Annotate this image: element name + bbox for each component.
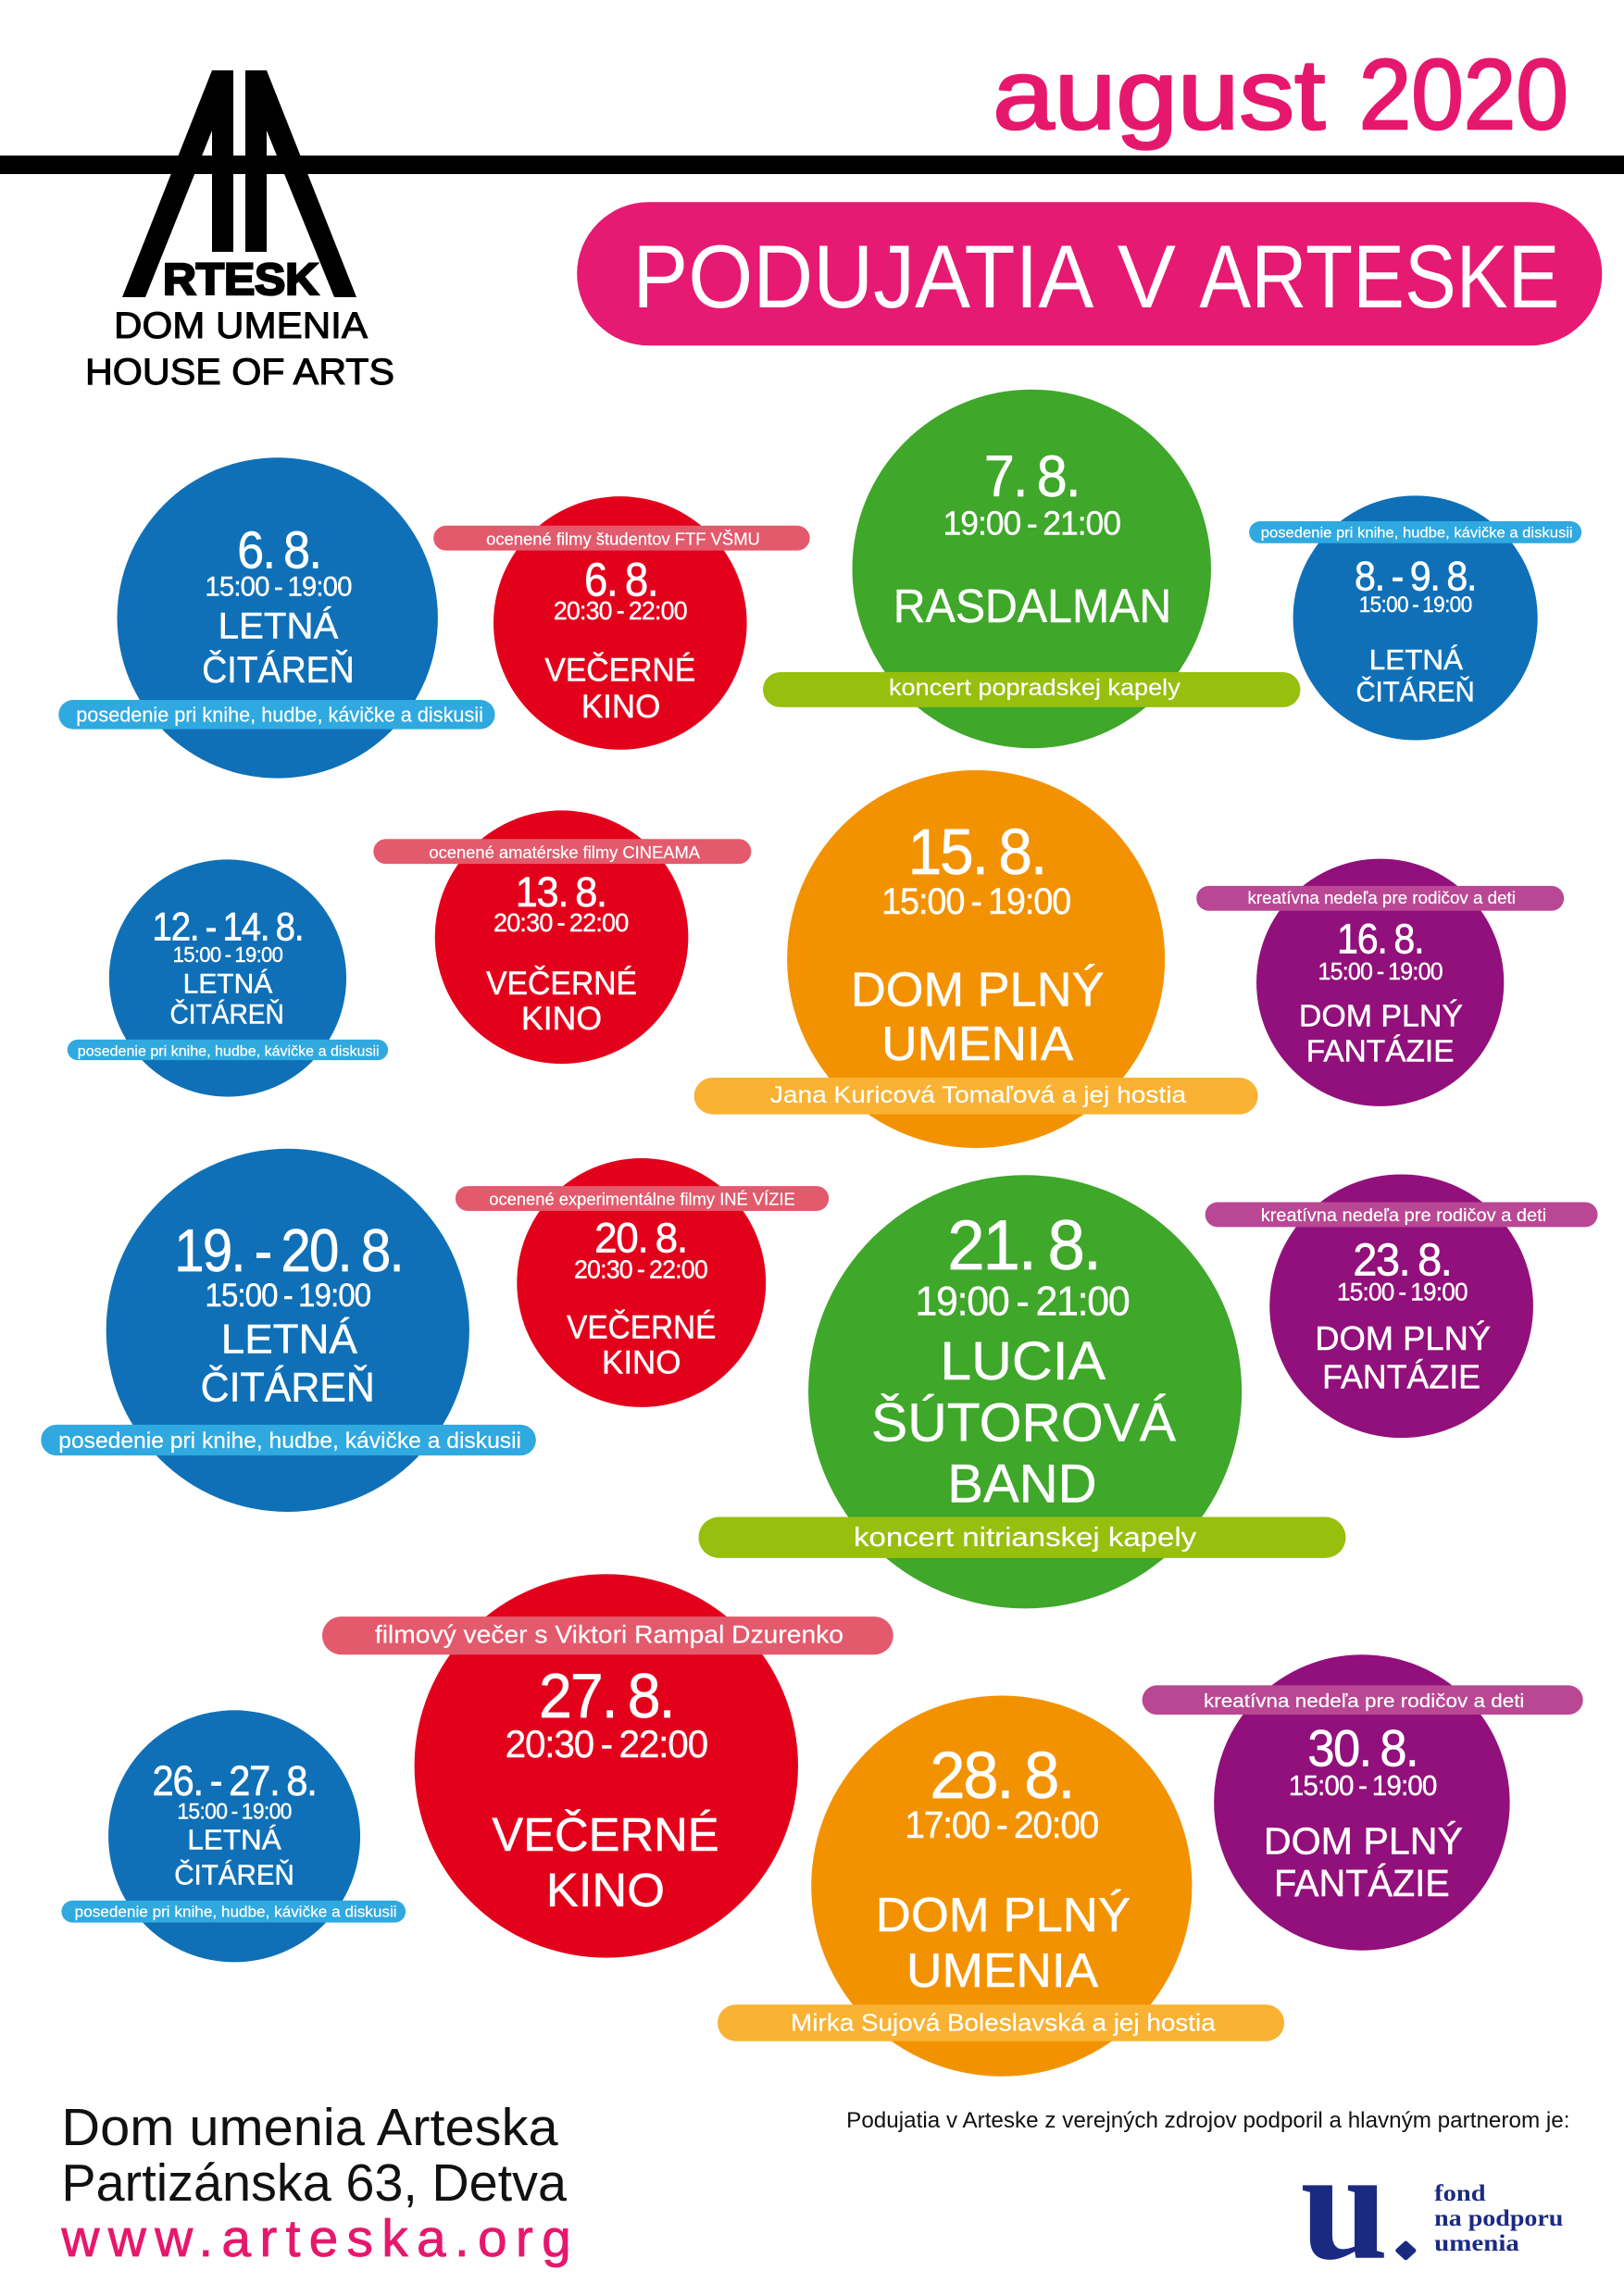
- event: Večerné kino 13. 8.: 20:30 - 22:00: [493, 908, 629, 937]
- heading pill: ARTESKE: [1199, 228, 1559, 327]
- event: Letná čitáreň 8. - 9. 8.: LETNÁ: [1369, 643, 1463, 676]
- logo: Fond na podporu umenia: na podporu: [1434, 2205, 1563, 2231]
- event: Lucia Šútorová Band 21. 8.: ŠÚTOROVÁ: [871, 1392, 1176, 1453]
- black header bar: [0, 156, 1624, 174]
- logo: Fond na podporu umenia: u: [1300, 2117, 1388, 2292]
- event: Letná čitáreň 12. - 14. 8.: LETNÁ: [183, 968, 273, 999]
- event: Večerné kino 13. 8.: 13. 8.: [516, 867, 606, 916]
- event: Letná čitáreň 19. - 20. 8.: posedenie pri knihe, hudbe, kávičke a diskusii: [58, 1429, 521, 1454]
- event: Letná čitáreň 12. - 14. 8.: ČITÁREŇ: [169, 999, 284, 1030]
- event: Večerné kino 27. 8.: [322, 1574, 893, 1958]
- event: Letná čitáreň 19. - 20. 8.: 15:00 - 19:00: [205, 1279, 370, 1314]
- event: Letná čitáreň 12. - 14. 8.: posedenie pri knihe, hudbe, kávičke a diskusii: [78, 1043, 380, 1059]
- event: Dom plný fantázie 30. 8.: [1143, 1654, 1583, 1951]
- event: Večerné kino 13. 8.: VEČERNÉ: [486, 966, 637, 1002]
- event: Večerné kino 13. 8.: ocenené amatérske filmy CINEAMA: [429, 843, 701, 862]
- event: Letná čitáreň 6. 8.: 6. 8.: [237, 521, 320, 580]
- event: Letná čitáreň 12. - 14. 8.: [68, 859, 388, 1097]
- event: Večerné kino 13. 8.: KINO: [521, 1002, 602, 1037]
- event: Letná čitáreň 6. 8.: 15:00 - 19:00: [205, 572, 352, 603]
- event: Dom plný umenia 28. 8.: 17:00 - 20:00: [905, 1803, 1098, 1846]
- event: Večerné kino 13. 8.: [373, 810, 751, 1064]
- heading pill: PODUJATIA: [632, 228, 1094, 327]
- event: Dom plný fantázie 16. 8.: [1196, 859, 1564, 1106]
- event: Večerné kino 6. 8.: [433, 496, 810, 750]
- event: Dom plný umenia 28. 8.: DOM PLNÝ: [876, 1889, 1131, 1942]
- event: Večerné kino 20. 8.: 20:30 - 22:00: [574, 1255, 707, 1284]
- event: Letná čitáreň 19. - 20. 8.: [41, 1149, 536, 1512]
- event: Dom plný umenia 15. 8.: Jana Kuricová Tomaľová a jej hostia: [770, 1082, 1187, 1108]
- event: Dom plný fantázie 16. 8.: kreatívna nedeľa pre rodičov a deti: [1248, 889, 1516, 907]
- event: Dom plný fantázie 30. 8.: DOM PLNÝ: [1264, 1819, 1463, 1862]
- event: Dom plný fantázie 16. 8.: FANTÁZIE: [1306, 1035, 1455, 1069]
- event: Dom plný umenia 28. 8.: [718, 1695, 1284, 2077]
- event: Lucia Šútorová Band 21. 8.: 21. 8.: [947, 1206, 1100, 1285]
- event: Lucia Šútorová Band 21. 8.: BAND: [947, 1454, 1097, 1515]
- event: Letná čitáreň 6. 8.: posedenie pri knihe, hudbe, kávičke a diskusii: [76, 704, 483, 727]
- event: Letná čitáreň 26. - 27. 8.: [61, 1710, 406, 1962]
- event: Letná čitáreň 19. - 20. 8.: ČITÁREŇ: [201, 1365, 375, 1411]
- event: Dom plný umenia 28. 8.: Mirka Sujová Boleslavská a jej hostia: [791, 2009, 1216, 2037]
- event: Letná čitáreň 26. - 27. 8.: LETNÁ: [187, 1824, 281, 1856]
- event: Letná čitáreň 19. - 20. 8.: 19. - 20. 8.: [174, 1217, 403, 1284]
- event: Letná čitáreň 26. - 27. 8.: posedenie pri knihe, hudbe, kávičke a diskusii: [75, 1903, 397, 1920]
- title: month: 2020: [1359, 39, 1568, 150]
- event: Večerné kino 6. 8.: VEČERNÉ: [544, 652, 695, 688]
- event: Dom plný fantázie 23. 8.: FANTÁZIE: [1322, 1357, 1480, 1395]
- sponsor note: Podujatia v Arteske z verejných zdrojov podporil a hlavným partnerom je:: [846, 2109, 1569, 2133]
- event: Letná čitáreň 8. - 9. 8.: 8. - 9. 8.: [1355, 554, 1476, 599]
- event: Rasdalman 7. 8.: RASDALMAN: [893, 580, 1171, 632]
- event: Lucia Šútorová Band 21. 8.: LUCIA: [940, 1331, 1106, 1391]
- event: Večerné kino 27. 8.: KINO: [546, 1864, 665, 1916]
- event: Letná čitáreň 19. - 20. 8.: LETNÁ: [221, 1316, 357, 1362]
- event: Dom plný umenia 15. 8.: 15. 8.: [908, 816, 1045, 888]
- title: month: august: [993, 39, 1325, 150]
- event: Dom plný fantázie 30. 8.: kreatívna nedeľa pre rodičov a deti: [1204, 1691, 1524, 1712]
- event: Večerné kino 27. 8.: filmový večer s Viktori Rampal Dzurenko: [375, 1621, 843, 1649]
- footer address: [61, 2098, 567, 2213]
- event: Letná čitáreň 12. - 14. 8.: 15:00 - 19:00: [173, 942, 282, 967]
- event: Letná čitáreň 8. - 9. 8.: [1249, 495, 1581, 740]
- event: Dom plný fantázie 23. 8.: DOM PLNÝ: [1315, 1319, 1491, 1357]
- event: Večerné kino 6. 8.: KINO: [581, 690, 660, 725]
- heading pill: V: [1118, 228, 1176, 327]
- event: Dom plný fantázie 30. 8.: FANTÁZIE: [1274, 1862, 1450, 1904]
- event: Rasdalman 7. 8.: koncert popradskej kapely: [889, 676, 1181, 701]
- footer address: Partizánska 63, Detva: [61, 2153, 567, 2213]
- event: Večerné kino 20. 8.: 20. 8.: [594, 1213, 687, 1261]
- logo: Fond na podporu umenia: fond: [1434, 2180, 1486, 2206]
- event: Večerné kino 20. 8.: [456, 1158, 829, 1407]
- event: Dom plný fantázie 16. 8.: 15:00 - 19:00: [1318, 957, 1443, 985]
- event: Večerné kino 6. 8.: ocenené filmy študentov FTF VŠMU: [486, 529, 760, 548]
- event: Letná čitáreň 6. 8.: LETNÁ: [219, 606, 339, 647]
- event: Letná čitáreň 26. - 27. 8.: ČITÁREŇ: [174, 1859, 294, 1891]
- website url: www.arteska.org: [60, 2209, 571, 2268]
- logo: Fond na podporu umenia: umenia: [1434, 2230, 1519, 2256]
- event: Letná čitáreň 8. - 9. 8.: ČITÁREŇ: [1356, 676, 1475, 708]
- event: Rasdalman 7. 8.: 7. 8.: [984, 444, 1080, 509]
- event: Rasdalman 7. 8.: 19:00 - 21:00: [943, 504, 1120, 542]
- event: Letná čitáreň 8. - 9. 8.: posedenie pri knihe, hudbe, kávičke a diskusii: [1261, 525, 1573, 541]
- event: Večerné kino 6. 8.: 20:30 - 22:00: [554, 596, 687, 625]
- event: Letná čitáreň 6. 8.: ČITÁREŇ: [202, 650, 355, 691]
- event: Dom plný fantázie 30. 8.: 30. 8.: [1307, 1719, 1418, 1777]
- event: Večerné kino 20. 8.: VEČERNÉ: [567, 1310, 716, 1346]
- event: Dom plný fantázie 16. 8.: DOM PLNÝ: [1299, 1000, 1463, 1034]
- event: Dom plný fantázie 23. 8.: kreatívna nedeľa pre rodičov a deti: [1261, 1206, 1546, 1226]
- event: Dom plný umenia 15. 8.: DOM PLNÝ: [851, 964, 1105, 1017]
- event: Večerné kino 27. 8.: 27. 8.: [539, 1661, 674, 1731]
- logo: Arteska: [85, 70, 394, 393]
- logo: Arteska: RTESK: [163, 256, 319, 305]
- event: Lucia Šútorová Band 21. 8.: koncert nitrianskej kapely: [854, 1523, 1197, 1553]
- event: Večerné kino 27. 8.: 20:30 - 22:00: [506, 1722, 707, 1766]
- logo: Fond na podporu umenia: [1300, 2117, 1563, 2292]
- event: Dom plný fantázie 23. 8.: [1206, 1174, 1598, 1438]
- event: Letná čitáreň 8. - 9. 8.: 15:00 - 19:00: [1359, 593, 1472, 618]
- event: Dom plný umenia 15. 8.: [694, 770, 1258, 1148]
- event: Lucia Šútorová Band 21. 8.: 19:00 - 21:00: [915, 1279, 1129, 1324]
- event: Večerné kino 20. 8.: ocenené experimentálne filmy INÉ VÍZIE: [489, 1191, 795, 1209]
- event: Letná čitáreň 6. 8.: [58, 457, 495, 779]
- event: Dom plný umenia 15. 8.: UMENIA: [881, 1017, 1074, 1071]
- event: Večerné kino 6. 8.: 6. 8.: [584, 554, 657, 606]
- logo: Arteska: HOUSE OF ARTS: [85, 352, 394, 393]
- event: Dom plný fantázie 23. 8.: 23. 8.: [1353, 1236, 1451, 1286]
- logo: Arteska: DOM UMENIA: [114, 306, 368, 346]
- heading pill: [577, 202, 1602, 345]
- event: Večerné kino 20. 8.: KINO: [602, 1346, 681, 1381]
- event: Dom plný fantázie 23. 8.: 15:00 - 19:00: [1337, 1278, 1468, 1305]
- title: month: [993, 39, 1568, 150]
- event: Večerné kino 27. 8.: VEČERNÉ: [492, 1808, 719, 1861]
- footer address: Dom umenia Arteska: [61, 2098, 558, 2157]
- event: Rasdalman 7. 8.: [763, 390, 1300, 748]
- event: Dom plný umenia 15. 8.: 15:00 - 19:00: [881, 881, 1070, 922]
- event: Dom plný umenia 28. 8.: 28. 8.: [930, 1740, 1073, 1813]
- event: Dom plný umenia 28. 8.: UMENIA: [906, 1944, 1098, 1998]
- event: Lucia Šútorová Band 21. 8.: [698, 1175, 1345, 1608]
- event: Dom plný fantázie 30. 8.: 15:00 - 19:00: [1289, 1769, 1437, 1802]
- event: Letná čitáreň 26. - 27. 8.: 26. - 27. 8.: [152, 1756, 317, 1804]
- event: Letná čitáreň 12. - 14. 8.: 12. - 14. 8.: [152, 905, 303, 949]
- event: Dom plný fantázie 16. 8.: 16. 8.: [1337, 915, 1423, 963]
- event: Letná čitáreň 26. - 27. 8.: 15:00 - 19:00: [177, 1800, 292, 1824]
